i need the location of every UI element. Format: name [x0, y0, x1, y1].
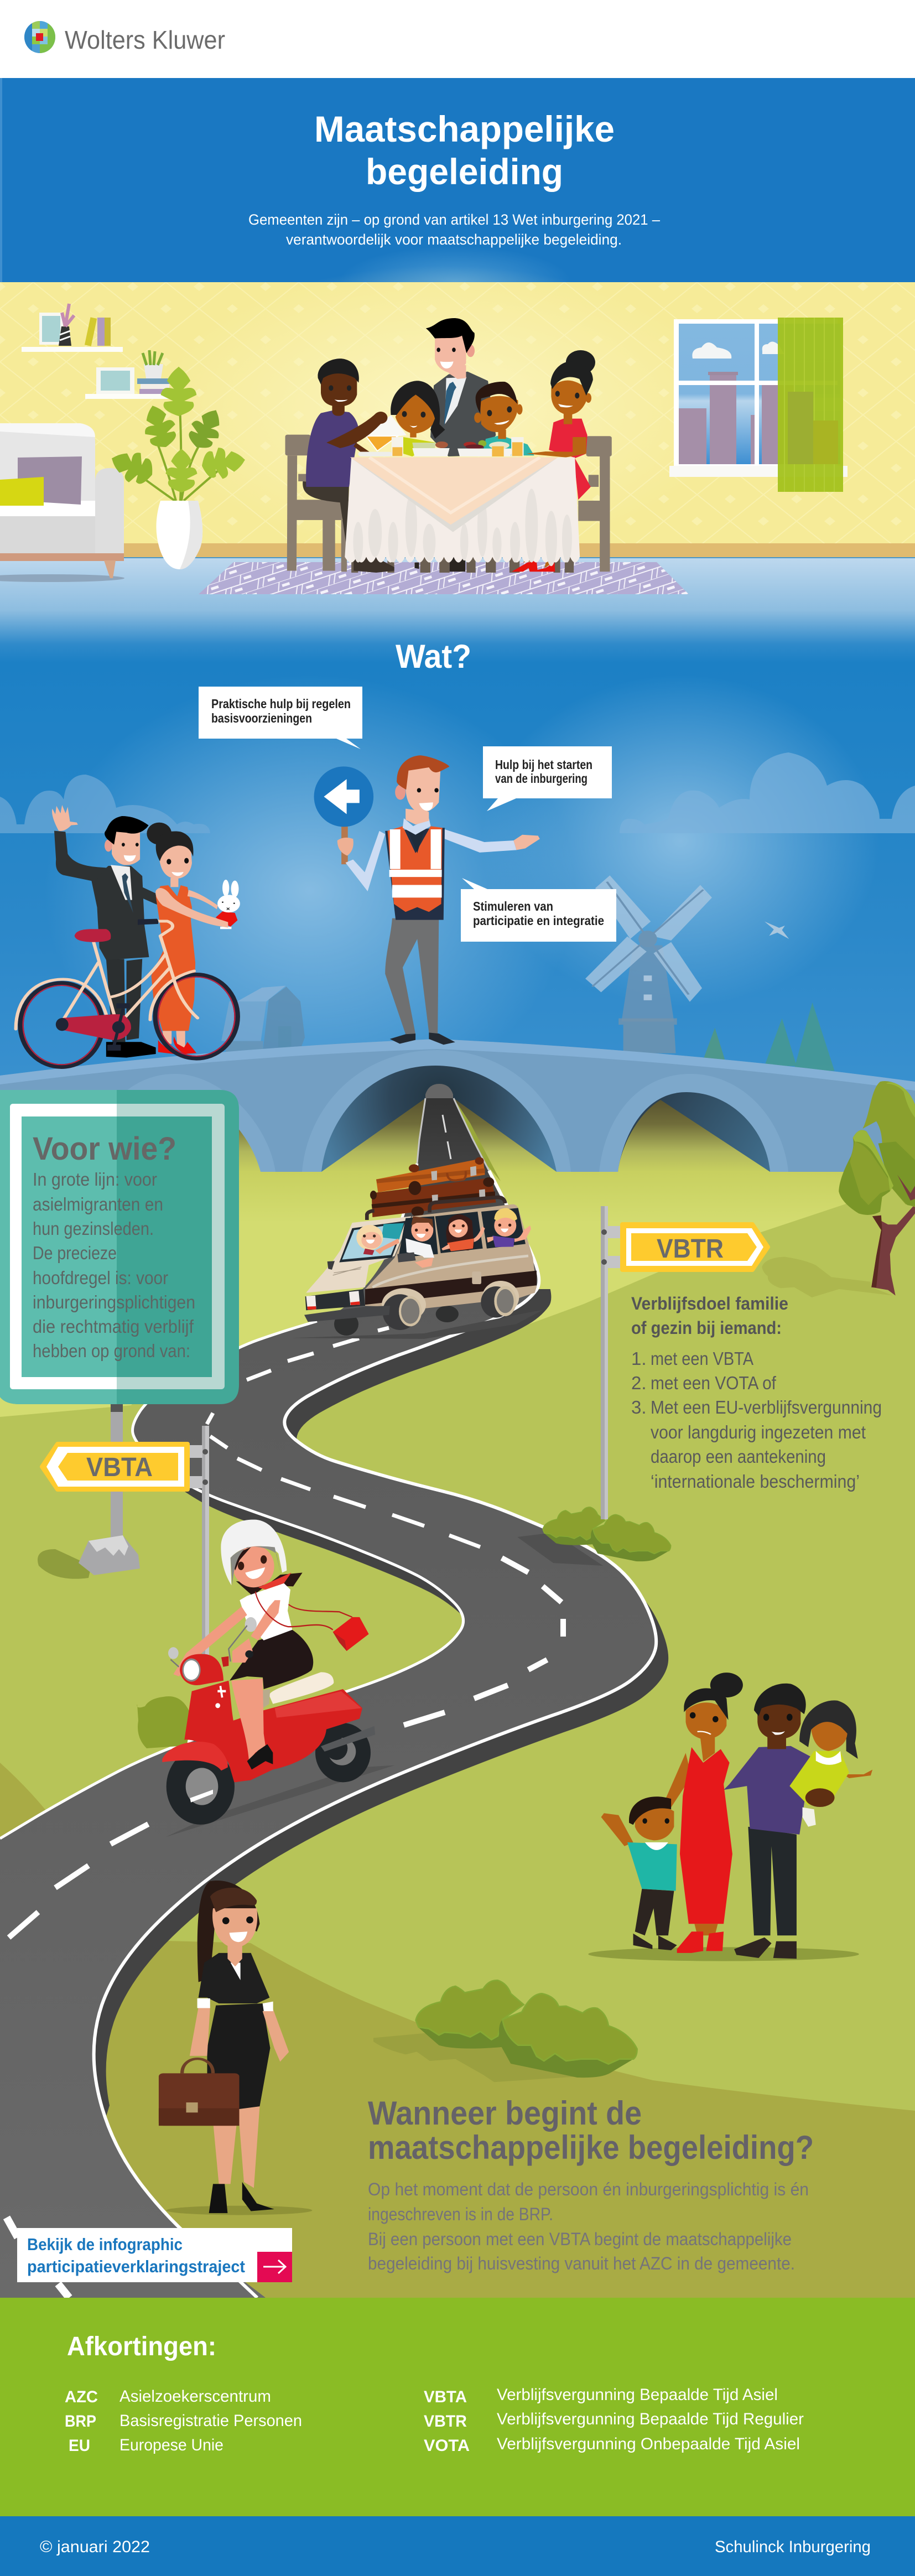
- text block: wanneer: [368, 2095, 814, 2273]
- panel: voor wie: [0, 1090, 239, 1404]
- icon: briefcase: [159, 2059, 240, 2126]
- pitcher of juice: [326, 412, 407, 451]
- shelf: lower: [85, 350, 169, 399]
- heading: Wat?: Wat?: [396, 638, 471, 675]
- dinner table with family: [285, 318, 612, 573]
- body text: inburgeringsplichtigen: [33, 1292, 195, 1312]
- abbreviations: right column: VBTR: [424, 2412, 467, 2430]
- road thickness: [95, 1289, 668, 2116]
- road: [0, 1098, 668, 2314]
- callout: practical help: basisvoorzieningen: [211, 711, 312, 725]
- sky and floor gradient: [0, 558, 915, 1172]
- back canopy: [862, 1081, 915, 1207]
- body text: hoofdregel is: voor: [33, 1268, 168, 1288]
- text block: VBTR list: of gezin bij iemand:: [631, 1318, 782, 1338]
- text block: VBTR list: [631, 1294, 882, 1492]
- footer bar: Schulinck Inburgering: [715, 2538, 871, 2556]
- icon: pink arrow button: [257, 2252, 292, 2282]
- footer bar: © januari 2022: [40, 2538, 150, 2556]
- woman on red scooter: [162, 1520, 394, 1837]
- chair: left: [285, 435, 347, 572]
- woman in orange dress: [147, 823, 218, 1054]
- signpost: VBTA: [42, 1426, 209, 1655]
- left arch: [89, 1074, 275, 1172]
- abbreviations: right column: VOTA: [424, 2437, 470, 2455]
- table food: [358, 437, 524, 456]
- tree trunk: [871, 1204, 915, 1296]
- businesswoman with briefcase: [159, 1881, 312, 2215]
- text block: wanneer: ingeschreven is in de BRP.: [368, 2204, 553, 2224]
- callout: participation and integration: Stimuleren van: [473, 899, 553, 913]
- abbreviations: left column: EU: [69, 2437, 90, 2455]
- family group waving: [588, 1673, 872, 1961]
- abbreviations: left column: Europese Unie: [119, 2436, 223, 2454]
- text block: VBTR list: Verblijfsdoel familie: [631, 1294, 788, 1313]
- plant: [106, 367, 247, 569]
- rider: [230, 1630, 313, 1689]
- link box: participatieverklaringstraject: Bekijk de infographic: [27, 2235, 183, 2254]
- abbreviations: right column: Verblijfsvergunning Bepaalde Tijd Regulier: [497, 2410, 804, 2428]
- scooter body: [228, 1689, 362, 1782]
- shelf: upper: [22, 304, 123, 352]
- callout: participation and integration: [461, 878, 616, 942]
- callout: start of integration: van de inburgering: [495, 771, 588, 786]
- body text: hun gezinsleden.: [33, 1218, 154, 1239]
- distant windmill: [585, 875, 789, 1053]
- wheel arches and wheels: [382, 1288, 426, 1321]
- abbreviations: right column: VBTA: [424, 2388, 467, 2406]
- text block: VBTR list: ‘internationale bescherming’: [651, 1471, 860, 1492]
- abbreviations: right column: [424, 2386, 804, 2455]
- text block: VBTR list: Met een EU-verblijfsvergunning: [651, 1397, 882, 1417]
- footer bar: [0, 2516, 915, 2576]
- text block: wanneer: Op het moment dat de persoon én inburgeringsplichtig is én: [368, 2179, 809, 2199]
- van front: [305, 1289, 365, 1310]
- van body: [365, 1204, 537, 1308]
- signpost: VBTA: VBTA: [86, 1453, 153, 1482]
- callout: practical help: Praktische hulp bij regelen: [211, 697, 351, 711]
- logo: Wolters Kluwer: Wolters Kluwer: [65, 25, 225, 54]
- tree on the right: [762, 1081, 915, 1297]
- heading: Voor wie?: [33, 1131, 176, 1167]
- icon: bird: [765, 921, 789, 939]
- girl being held: [789, 1700, 872, 1827]
- callout: start of integration: Hulp bij het starten: [495, 757, 592, 772]
- heading: Afkortingen:: [67, 2332, 216, 2361]
- abbreviations: right column: Verblijfsvergunning Onbepaalde Tijd Asiel: [497, 2435, 800, 2453]
- person: man in suit with bicycle and woman: [16, 805, 240, 1067]
- person: woman at table: [526, 350, 595, 500]
- central arch: [302, 1050, 571, 1172]
- abbreviations: left column: [65, 2387, 302, 2455]
- scooter front: [180, 1654, 223, 1685]
- panel: abbreviations: [0, 2298, 915, 2516]
- abbreviations: right column: Verblijfsvergunning Bepaalde Tijd Asiel: [497, 2386, 778, 2404]
- icon: globe logo: [24, 21, 55, 53]
- road centre dashes: [7, 1115, 563, 2298]
- mother in red dress: [666, 1673, 743, 1953]
- text block: VBTR list: met een VOTA of: [651, 1373, 777, 1393]
- text block: VBTR list: voor langdurig ingezeten met: [651, 1422, 866, 1442]
- panel: blue title header: [0, 78, 915, 318]
- logo: Wolters Kluwer: [24, 21, 225, 54]
- abbreviations: left column: BRP: [65, 2412, 96, 2430]
- icon: red handbag: [256, 1592, 369, 1651]
- panel: road landscape ground: [0, 1107, 915, 2298]
- bush: behind scooter: [137, 1696, 191, 1748]
- roof rack: [367, 1197, 505, 1220]
- luggage: [370, 1157, 496, 1217]
- tree shadow: [762, 1257, 893, 1297]
- icon: white rabbit toy: [216, 880, 240, 929]
- window with curtain: [669, 318, 848, 492]
- road edge line: top thin: [417, 1098, 489, 1171]
- person: girl at table: [391, 381, 445, 456]
- lower dark hill: [0, 1936, 915, 2298]
- signpost: VBTR: VBTR: [657, 1234, 724, 1264]
- scooter wheels: [315, 1723, 371, 1782]
- distant cottage: [221, 986, 305, 1052]
- sofa: [0, 423, 124, 582]
- road edge line: left: [0, 1164, 464, 1838]
- bushes: lower middle: [373, 1980, 637, 2082]
- person: man pouring: [303, 359, 370, 549]
- chair: right: [578, 436, 612, 572]
- person: man in suit: [426, 318, 496, 456]
- subtitle text: Gemeenten zijn – op grond van artikel 13 Wet inburgering 2021 –: [248, 211, 660, 228]
- text block: wanneer: Bij een persoon met een VBTA begint de maatschappelijke: [368, 2229, 792, 2249]
- subtitle text: verantwoordelijk voor maatschappelijke begeleiding.: [286, 231, 622, 248]
- link box: participatieverklaringstraject: participatieverklaringstraject: [27, 2257, 245, 2276]
- light hill: [0, 1107, 915, 1417]
- man waving: [52, 805, 158, 1058]
- text block: VBTR list: 3.: [631, 1397, 647, 1417]
- signpost: VBTR: [601, 1206, 768, 1519]
- signpost pole: rock base: [38, 1404, 140, 1579]
- bicycle: [16, 919, 237, 1067]
- sky glow and clouds: [0, 675, 915, 1107]
- callout: practical help: [199, 687, 362, 749]
- body text: De precieze: [33, 1243, 117, 1263]
- body text: [33, 1169, 195, 1361]
- road edge line: right: [94, 1171, 656, 2298]
- boy waving: [601, 1796, 677, 1950]
- title: [314, 108, 615, 192]
- title: begeleiding: [366, 151, 563, 192]
- van passengers: [356, 1208, 531, 1268]
- person: boy at table: [474, 382, 534, 455]
- callout: participation and integration: participatie en integratie: [473, 913, 604, 928]
- abbreviations: left column: Basisregistratie Personen: [119, 2412, 302, 2430]
- panel: living room scene: [0, 266, 915, 1172]
- text block: VBTR list: daarop een aantekening: [651, 1446, 826, 1467]
- tablecloth: [345, 458, 580, 573]
- van with luggage: [292, 1157, 542, 1339]
- body text: die rechtmatig verblijf: [33, 1316, 194, 1337]
- right arch: [599, 1074, 788, 1172]
- bush: beside VBTR post: [517, 1507, 671, 1566]
- link box: participatieverklaringstraject: [17, 2228, 292, 2282]
- text block: VBTR list: met een VBTA: [651, 1348, 753, 1369]
- father: [724, 1684, 811, 1959]
- text block: VBTR list: 1.: [631, 1348, 647, 1369]
- body text: hebben op grond van:: [33, 1341, 190, 1361]
- bridge: [0, 1039, 915, 1172]
- distant trees: [703, 1003, 835, 1071]
- callout: start of integration: [483, 746, 612, 811]
- text block: VBTR list: 2.: [631, 1373, 647, 1393]
- subtitle text: [248, 211, 660, 248]
- rug: [199, 562, 689, 594]
- abbreviations: left column: Asielzoekerscentrum: [119, 2387, 271, 2406]
- person: guide in orange vest with sign: [314, 755, 540, 1045]
- front canopy: [839, 1130, 893, 1215]
- body text: asielmigranten en: [33, 1194, 163, 1214]
- text block: wanneer: maatschappelijke begeleiding?: [368, 2129, 814, 2166]
- text block: wanneer: Wanneer begint de: [368, 2095, 642, 2132]
- text block: wanneer: begeleiding bij huisvesting vanuit het AZC in de gemeente.: [368, 2253, 795, 2273]
- title: Maatschappelijke: [314, 108, 615, 149]
- icon: blue arrow sign: [314, 766, 373, 864]
- body text: In grote lijn: voor: [33, 1169, 157, 1190]
- abbreviations: left column: AZC: [65, 2388, 98, 2406]
